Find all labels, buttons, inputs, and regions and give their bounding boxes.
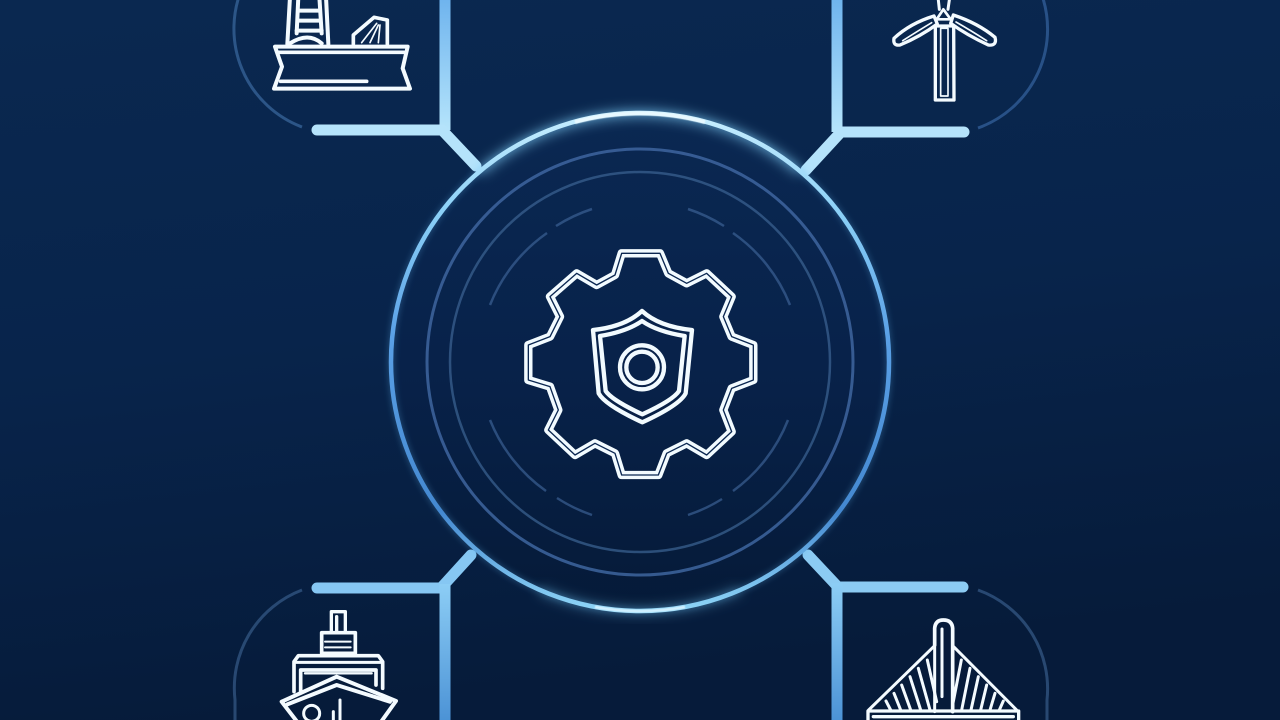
funnel	[331, 612, 345, 632]
icon: ship	[282, 612, 396, 720]
connector: top-left	[317, 0, 476, 166]
pylon	[935, 620, 953, 712]
tower	[935, 26, 954, 100]
stay cables	[869, 646, 1017, 710]
blades	[894, 0, 995, 45]
superstructure	[294, 656, 383, 692]
icon: cable-stayed bridge	[868, 620, 1019, 720]
shield core ring	[620, 345, 664, 389]
connector: bottom-right	[808, 555, 963, 720]
connector: bottom-left	[317, 555, 471, 720]
shield	[593, 311, 692, 422]
connector: top-right	[806, 0, 964, 170]
deck	[274, 47, 410, 89]
concentric rings	[427, 149, 853, 575]
hub	[937, 9, 951, 19]
icon: gear with shield	[528, 253, 753, 475]
panel: bottom-left arc	[234, 590, 302, 720]
icon: offshore platform	[274, 0, 410, 89]
central hub circle	[391, 113, 889, 611]
icon: wind turbine	[894, 0, 995, 100]
anchor circle and mast	[304, 700, 340, 720]
panel: top-right arc	[978, 0, 1048, 128]
derrick tower	[287, 0, 328, 44]
deck	[868, 711, 1019, 720]
helideck	[353, 17, 387, 44]
upper deck	[322, 633, 355, 653]
panel: top-left arc	[234, 0, 302, 127]
panel: bottom-right arc	[978, 590, 1048, 720]
gear outline	[528, 253, 753, 475]
hull	[282, 677, 396, 720]
